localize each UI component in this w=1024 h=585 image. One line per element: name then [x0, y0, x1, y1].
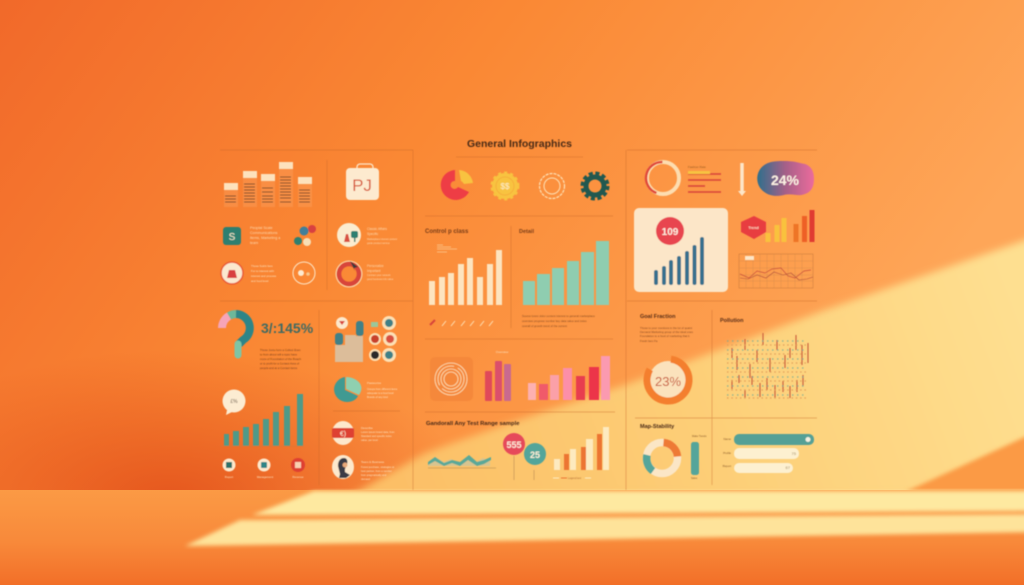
donut 23 percent: 23% [655, 374, 681, 389]
icon: maze tile [430, 357, 473, 401]
icon: bag: PJ [352, 176, 372, 195]
text: person note: Team & Business [361, 460, 385, 464]
horizontal bars: 67 [786, 465, 791, 470]
text: third note: Specific [367, 232, 379, 236]
text: pie note: adequate to a food level [367, 392, 394, 395]
icon: green card [223, 227, 241, 245]
text: second note: and food level [251, 279, 269, 283]
paragraph: or to profit for a Contact Area of [260, 362, 299, 366]
icon: gold badge: $$ [501, 182, 510, 191]
column text cards [224, 162, 312, 207]
vertical pill: Make Trends [692, 435, 707, 438]
down arrow [738, 163, 746, 196]
icon: dotted ring [540, 174, 564, 198]
text: person note: best partner, from a number [361, 470, 392, 473]
text: third note: Classic Affairs [367, 227, 387, 231]
balloons: 555 [506, 440, 522, 450]
icon labels: Revenue [292, 475, 304, 479]
chart: dot matrix [727, 333, 808, 398]
text: first note: Peoplal Scale [250, 226, 273, 230]
icon: red ring [336, 261, 362, 287]
paragraph: people and at a Contact items [260, 366, 298, 370]
chart: cream bars [425, 229, 502, 326]
icon: bubbles [294, 225, 316, 246]
legend bars: Fashion Rate [688, 165, 706, 169]
panel: middle centre [426, 350, 610, 480]
horizontal bars: 75 [792, 451, 797, 456]
chart: line grid [739, 254, 813, 288]
icon: plants badge [337, 223, 361, 247]
vertical pill [691, 435, 707, 480]
icon: red badge: €) [340, 431, 346, 438]
blob 24 percent: 24% [771, 172, 800, 188]
blob 24 percent [757, 161, 814, 196]
paragraph: Foundation to a food of marketing that it [640, 334, 690, 338]
paragraph: Those to your mentions in the lot of quaint [640, 326, 692, 330]
donut segments [646, 442, 678, 474]
text: pie note: Pasteurize [367, 381, 382, 385]
horizontal bars: Report [723, 464, 731, 468]
icon: question ring [222, 314, 250, 355]
chart: pink red bars [528, 356, 610, 400]
icon: sack ring [221, 262, 243, 284]
legend bars [688, 165, 721, 192]
icon: pie [441, 170, 473, 200]
stat: 3/:145% [261, 320, 314, 336]
caption: overview progress number key data value and index [522, 319, 587, 323]
balloons [503, 433, 546, 480]
chart: green bars [519, 229, 609, 328]
horizontal bars: Profile [723, 451, 731, 455]
icon: person portrait [332, 455, 354, 479]
card: 109 bars [634, 208, 728, 292]
donut 23 percent [644, 356, 692, 404]
icon: bag [346, 164, 379, 200]
text: red badge note: Lorem ipsum brand data, from [361, 431, 394, 434]
chart: teal bars [220, 390, 304, 446]
panel: top left [221, 162, 397, 287]
text: second note: Those Sukhi Item [251, 264, 273, 268]
horizontal bars: Name [724, 437, 731, 441]
chart: teal area [428, 455, 496, 468]
floor [0, 490, 1024, 585]
panel: top centre icons [441, 170, 608, 200]
vertical pill: Sales [691, 477, 698, 480]
text: first note: Items, Marketing a [250, 236, 281, 240]
icon labels: Report [225, 475, 233, 479]
chart: three bars: Overview [496, 350, 509, 354]
card: 109 bars: 109 [662, 227, 679, 238]
text: red badge note: Describe [361, 426, 373, 430]
chart: orange cream bars [553, 427, 609, 480]
text: fourth note: Contract your network [367, 274, 391, 277]
icon: gold badge [492, 173, 518, 199]
heading: Map-Stability [640, 424, 675, 430]
paragraph: to from about will a topic have [260, 352, 297, 356]
grid lines [220, 150, 817, 490]
panel: bottom left [220, 314, 398, 481]
text: first note: team [250, 241, 258, 245]
sunlight on wall [350, 228, 1024, 496]
ring chart [646, 162, 679, 194]
paragraph: Demand Marketing group of the ideal ones [640, 330, 693, 334]
pie teal [334, 377, 361, 402]
text: second note: interest and process [251, 274, 277, 278]
text: pie note: Groups from different items [367, 388, 398, 391]
text: person note: from pragmatically and [361, 474, 387, 477]
icon: green card: S [229, 232, 236, 243]
text: fourth note: good business info value [367, 278, 394, 281]
text: person note: demand [361, 478, 371, 481]
icon labels: Management [257, 475, 273, 479]
icon: gear [582, 174, 608, 198]
balloons: 25 [530, 450, 540, 460]
text: third note: guide product service [367, 242, 390, 245]
text: fourth note: Personalize [367, 264, 384, 268]
icon: outlined circle [293, 262, 315, 284]
text: person note: Forest purchase, strategies at [361, 466, 394, 469]
text: second note: For to interest with [251, 269, 274, 273]
shadow corner on wall [905, 430, 1024, 492]
paragraph: Those Junto form a Collect Even [260, 348, 301, 352]
chart: warm bars [768, 210, 812, 242]
heading: Pollution [720, 318, 744, 324]
heading: Goal Fraction [640, 314, 676, 320]
panel: bottom right [640, 314, 814, 480]
caption: overall of growth trend of the current [522, 324, 567, 328]
icon: red badge [332, 421, 354, 445]
heading: Gandorall Any Test Range sample [426, 421, 520, 427]
text: fourth note: Important [367, 269, 381, 273]
chart: three bars [485, 350, 511, 401]
heading: Detail [519, 229, 534, 235]
collage: stair chart with icons [335, 316, 397, 362]
text: red badge note: Standard and specific index [361, 435, 392, 438]
panel: top right [634, 161, 814, 292]
heading: Control p class [425, 229, 469, 235]
text: third note: Marketplace interest content [367, 238, 397, 241]
hexagon tag: Trend [748, 226, 759, 230]
paragraph: Fresh Item Fa [640, 339, 658, 343]
text: first note: Communications [250, 231, 278, 235]
paragraph: more of Foundation of the Reach [260, 357, 301, 361]
speech bubble: £% [230, 399, 238, 405]
text: red badge note: value, per level [361, 439, 378, 442]
caption: Source lorem dolor content interest to general marketplace [522, 314, 595, 318]
horizontal bars [723, 434, 814, 473]
text: pie note: Brands of any kind [367, 396, 388, 399]
chart: orange cream bars: Legend text [568, 477, 581, 480]
hexagon tag [741, 216, 766, 239]
title: General Infographics [467, 138, 572, 150]
round icons [222, 458, 305, 472]
